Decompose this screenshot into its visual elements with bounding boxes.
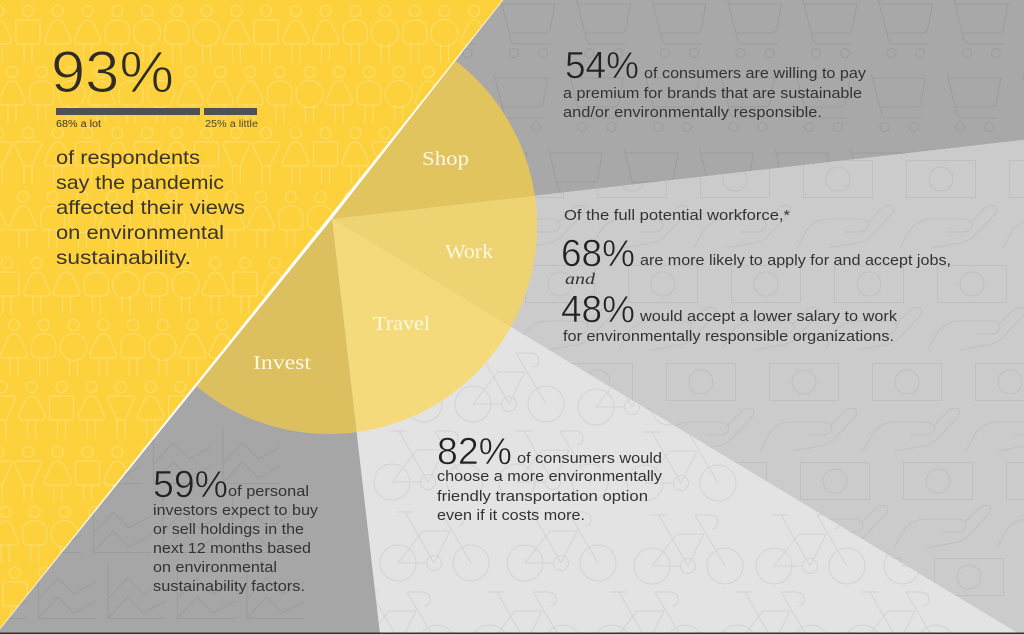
description text: of consumers are willing to pay <box>644 65 867 82</box>
description text: even if it costs more. <box>437 507 585 524</box>
description text <box>153 483 319 595</box>
stat: 54% shop <box>563 45 867 121</box>
stat: 93% of respondents <box>51 40 258 269</box>
pie slice: invest <box>196 219 357 434</box>
stat: 82% travel <box>437 431 663 524</box>
number: 93%: 93% <box>51 40 174 105</box>
description text: say the pandemic <box>56 172 224 194</box>
description text: of respondents <box>56 147 200 169</box>
number: 48%: 48% <box>561 289 635 331</box>
description text: on environmental <box>56 222 224 244</box>
number: 54%: 54% <box>565 45 639 87</box>
description text: next 12 months based <box>153 540 311 557</box>
description text: friendly transportation option <box>437 488 648 505</box>
pie label: Shop: Shop <box>422 148 469 170</box>
description text: and/or environmentally responsible. <box>563 104 822 121</box>
panel: shop background <box>332 0 1024 219</box>
intro text: Of the full potential workforce,* <box>564 207 790 224</box>
pie slice: work <box>332 196 537 327</box>
number: 68%: 68% <box>561 233 635 275</box>
line chart pattern <box>0 428 316 620</box>
text: and: and <box>565 271 596 288</box>
description text <box>437 450 663 524</box>
pie slice: travel <box>332 219 511 432</box>
description text: or sell holdings in the <box>153 521 304 538</box>
bar: 68% a lot: 68% a lot <box>56 119 101 130</box>
description text: of consumers would <box>517 450 662 467</box>
bicycle pattern <box>374 352 951 632</box>
description text: affected their views <box>56 197 245 219</box>
pie label: Work: Work <box>445 241 493 263</box>
pie slice: shop <box>332 61 535 219</box>
panel: work background <box>445 140 1024 632</box>
banknote and hand pattern <box>524 160 1024 596</box>
text: lower salary: would accept a lower salary to work <box>639 308 898 325</box>
description text: on environmental <box>153 559 277 576</box>
panel: invest background <box>0 219 380 634</box>
text: more likely: are more likely to apply for and accept jobs, <box>640 252 951 269</box>
panel: yellow respondents background <box>0 0 503 629</box>
pie label: Travel: Travel <box>373 313 430 335</box>
people icon pattern <box>0 5 482 616</box>
panel: travel background <box>356 327 1016 632</box>
stat: 59% invest <box>153 464 319 595</box>
divider: white edge of yellow panel <box>0 0 503 629</box>
pie chart: four-part circle <box>196 61 537 434</box>
description text <box>56 147 245 269</box>
shopping cart pattern <box>369 0 1024 211</box>
text: lower salary: for environmentally responsible organizations. <box>563 328 894 345</box>
description text: a premium for brands that are sustainable <box>563 85 862 102</box>
pie label: Invest: Invest <box>253 352 312 374</box>
bar: 25% a little: 25% a little <box>205 119 258 130</box>
number: 59%: 59% <box>153 464 228 506</box>
bottom edge line <box>0 632 1024 634</box>
description text: choose a more environmentally <box>437 468 663 485</box>
description text: investors expect to buy <box>153 502 319 519</box>
bar: 25% a little <box>204 108 258 130</box>
number: 82%: 82% <box>437 431 512 473</box>
bar: 68% a lot <box>56 108 200 130</box>
stat: work <box>561 207 951 345</box>
text: lower salary <box>563 308 898 345</box>
description text: sustainability. <box>56 247 191 269</box>
description text <box>563 65 867 121</box>
description text: sustainability factors. <box>153 578 305 595</box>
description text: of personal <box>228 483 309 500</box>
